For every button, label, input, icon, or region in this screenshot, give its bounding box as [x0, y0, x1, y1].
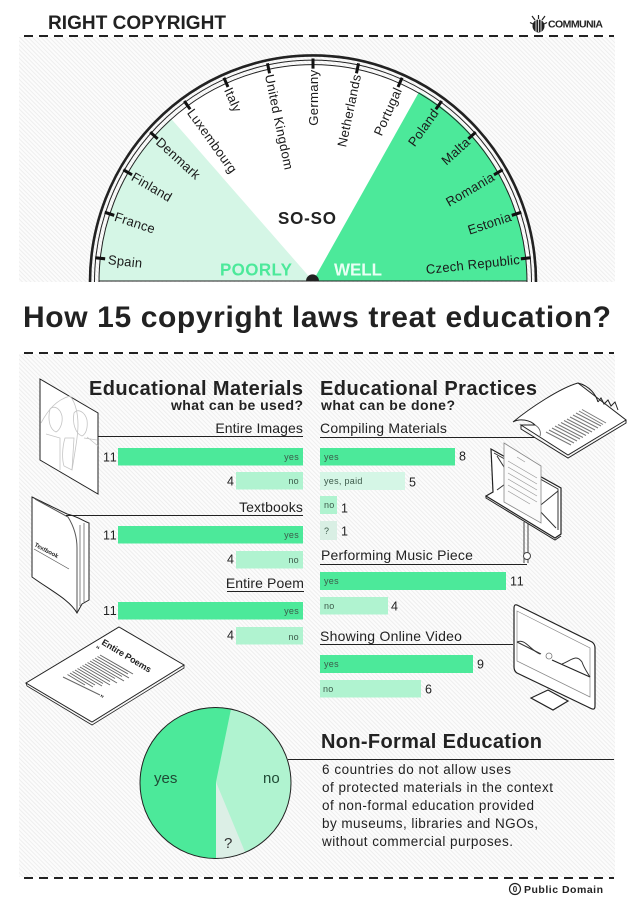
country labels: Denmark [153, 134, 204, 183]
chart: compiling materials: yes, paid [324, 476, 363, 486]
illustration: textbook [32, 497, 89, 613]
gauge: copyright ratings of 15 countries [90, 55, 536, 282]
chart: compiling materials [320, 420, 535, 540]
chart: entire poem: 11 [103, 604, 117, 618]
pie chart: non-formal education: yes [154, 770, 177, 787]
body text: of protected materials in the context [322, 780, 553, 795]
chart: entire poem: 4 [227, 628, 235, 642]
chart: entire images: no [288, 476, 299, 486]
chart: entire images: 11 [103, 450, 117, 464]
chart: compiling materials: no [324, 500, 335, 510]
chart: entire images: Entire Images [215, 420, 303, 436]
illustration: textbook: Textbook [33, 542, 60, 560]
chart: compiling materials: 8 [459, 450, 467, 464]
subheading: what can be used?: what can be used? [170, 397, 303, 413]
chart: performing music piece: 4 [391, 600, 399, 614]
illustration: poem page: Entire Poems [100, 637, 153, 675]
footer: public domain mark: 0 [513, 885, 518, 894]
body text: by museums, libraries and NGOs, [322, 816, 538, 831]
country labels: United Kingdom [262, 73, 296, 171]
subheading: what can be done?: what can be done? [320, 397, 455, 413]
gauge label: so-so: SO-SO [278, 208, 336, 228]
heading: right copyright: RIGHT COPYRIGHT [48, 13, 226, 34]
country labels: Poland [405, 106, 442, 149]
section: non-formal education [288, 731, 614, 849]
chart: entire poem: Entire Poem [226, 575, 304, 591]
chart: compiling materials: Compiling Materials [320, 420, 447, 436]
chart: entire images: 4 [227, 474, 235, 488]
main title: How 15 copyright laws treat education? [23, 301, 611, 334]
chart: entire poem [103, 575, 304, 644]
illustration: framed photo [40, 379, 98, 494]
pie slice: unknown [216, 782, 245, 858]
country labels: Netherlands [334, 73, 364, 148]
chart: showing online video: 9 [477, 658, 485, 672]
chart: performing music piece: 11 [510, 574, 524, 588]
illustration: folded magazine [513, 383, 626, 458]
chart: compiling materials: ? [324, 526, 329, 536]
pie slice: yes [140, 707, 231, 859]
chart: textbooks: yes [284, 530, 299, 540]
chart: entire images: yes [284, 452, 299, 462]
chart: compiling materials: 5 [409, 476, 417, 490]
heading: non-formal education: Non-Formal Education [321, 731, 542, 753]
illustration: monitor [514, 605, 595, 710]
country labels: Germany [306, 69, 321, 126]
chart: entire poem: yes [284, 606, 299, 616]
chart: showing online video: yes [324, 659, 339, 669]
country labels: Italy [221, 85, 245, 115]
country labels: Czech Republic [425, 252, 521, 277]
chart: textbooks: 11 [103, 528, 117, 542]
chart: textbooks: Textbooks [239, 499, 303, 515]
chart: showing online video: 6 [425, 682, 433, 696]
body text: of non-formal education provided [322, 798, 534, 813]
logo: Communia: COMMUNIA [548, 18, 603, 30]
panel: educational materials [66, 378, 304, 644]
chart: performing music piece: no [324, 601, 335, 611]
country labels: Finland [129, 169, 175, 205]
country labels: France [113, 209, 157, 237]
country labels: Romania [443, 169, 498, 210]
gauge label: well: WELL [334, 259, 382, 279]
chart: showing online video: Showing Online Video [320, 628, 462, 644]
footer: public domain mark: Public Domain [524, 884, 603, 896]
illustration: music stand [486, 443, 561, 563]
chart: performing music piece: Performing Music Piece [321, 547, 473, 563]
illustration: poem page [26, 627, 184, 725]
pie chart: non-formal education: ? [224, 835, 232, 852]
chart: entire images [98, 420, 303, 490]
country labels [107, 69, 521, 277]
chart: compiling materials: 1 [341, 524, 349, 538]
pie chart: non-formal education [140, 707, 291, 859]
country labels: Malta [438, 134, 473, 168]
country labels: Spain [107, 252, 143, 271]
gauge sector: well [313, 92, 527, 281]
chart: compiling materials: yes [324, 452, 339, 462]
chart: performing music piece: yes [324, 576, 339, 586]
chart: showing online video: no [323, 684, 334, 694]
body text: 6 countries do not allow uses [322, 762, 511, 777]
chart: performing music piece [320, 547, 527, 614]
chart: entire poem: no [288, 632, 299, 642]
chart: compiling materials: 1 [341, 502, 349, 516]
chart: showing online video [320, 628, 513, 698]
country labels: Luxembourg [184, 106, 240, 176]
body text: without commercial purposes. [321, 834, 513, 849]
body text [321, 762, 553, 849]
logo: Communia [530, 15, 603, 32]
gauge label: poorly: POORLY [220, 259, 293, 279]
heading: educational practices: Educational Practices [320, 378, 537, 400]
illustration: poem page: “ [93, 644, 101, 654]
chart: textbooks: no [288, 555, 299, 565]
pie chart: non-formal education: no [263, 770, 280, 787]
chart: textbooks [66, 499, 303, 568]
country labels: Estonia [466, 209, 514, 238]
country labels: Portugal [371, 85, 405, 138]
illustration: poem page: ” [97, 693, 105, 703]
gauge sector: poorly [99, 118, 313, 281]
gauge sector: so-so [171, 64, 419, 281]
heading: educational materials: Educational Materials [89, 378, 303, 400]
panel: educational practices [320, 378, 537, 698]
chart: textbooks: 4 [227, 552, 235, 566]
